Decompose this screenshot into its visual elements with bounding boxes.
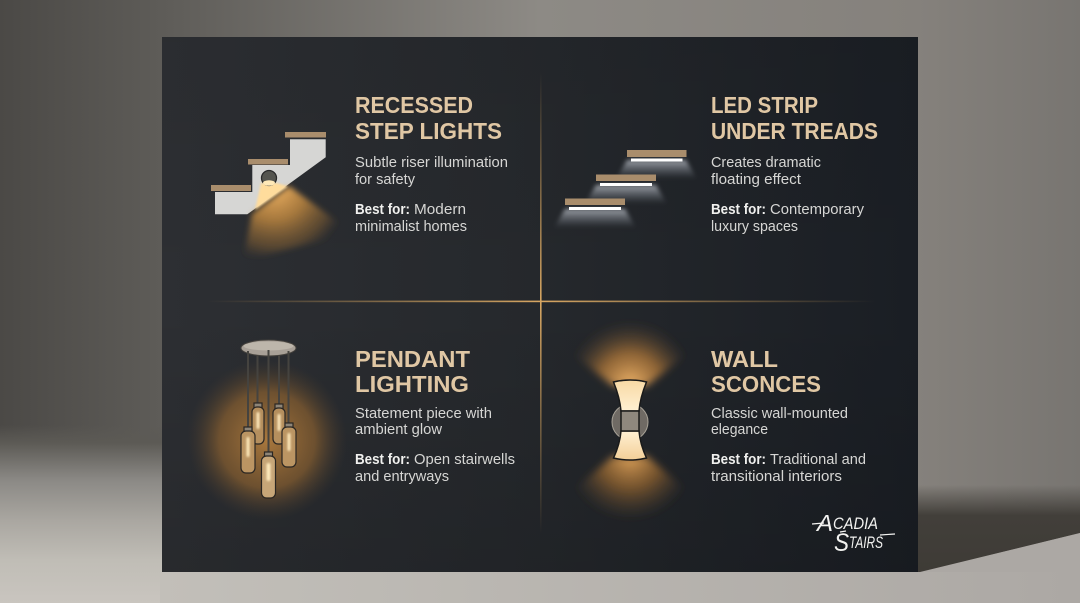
panel: LED strip under treads <box>554 92 878 235</box>
heading: LIGHTING <box>355 371 469 397</box>
description: for safety <box>355 172 416 188</box>
icon: floating treads with LED strips <box>554 150 697 228</box>
logo: Acadia Stairs: TAIRS <box>849 533 883 552</box>
best for: Best for: <box>355 452 410 468</box>
best for: Traditional and <box>770 452 866 468</box>
panel: wall sconces <box>562 320 866 522</box>
description: ambient glow <box>355 422 443 438</box>
heading: LED STRIP <box>711 92 818 118</box>
best for: Contemporary <box>770 202 865 218</box>
icon: stair with recessed light <box>211 132 338 256</box>
best for: and entryways <box>355 469 449 485</box>
description: Subtle riser illumination <box>355 155 508 171</box>
best for: Best for: <box>711 202 766 218</box>
description: floating effect <box>711 172 801 188</box>
panel: recessed step lights <box>211 92 508 256</box>
logo: Acadia Stairs: S <box>834 529 849 557</box>
heading: RECESSED <box>355 92 473 118</box>
best for: minimalist homes <box>355 219 467 235</box>
logo: Acadia Stairs <box>812 510 895 557</box>
pendant jars <box>241 403 296 498</box>
best for: Open stairwells <box>414 452 515 468</box>
logo: Acadia Stairs: CADIA <box>833 514 878 533</box>
panel: pendant lighting <box>187 340 515 520</box>
best for: transitional interiors <box>711 469 842 485</box>
description: Creates dramatic <box>711 155 821 171</box>
best for: Modern <box>414 202 466 218</box>
heading: WALL <box>711 346 778 372</box>
icon: pendant cluster with glow <box>187 340 347 520</box>
board panel <box>162 37 918 572</box>
best for: Best for: <box>355 202 410 218</box>
icon: wall sconce <box>562 320 698 522</box>
logo: Acadia Stairs: A <box>815 510 833 536</box>
heading: SCONCES <box>711 371 821 397</box>
heading: UNDER TREADS <box>711 118 878 144</box>
heading: STEP LIGHTS <box>355 118 502 144</box>
description: Classic wall-mounted <box>711 406 848 422</box>
best for: luxury spaces <box>711 219 798 235</box>
heading: PENDANT <box>355 346 471 372</box>
description: Statement piece with <box>355 406 492 422</box>
description: elegance <box>711 422 768 438</box>
best for: Best for: <box>711 452 766 468</box>
